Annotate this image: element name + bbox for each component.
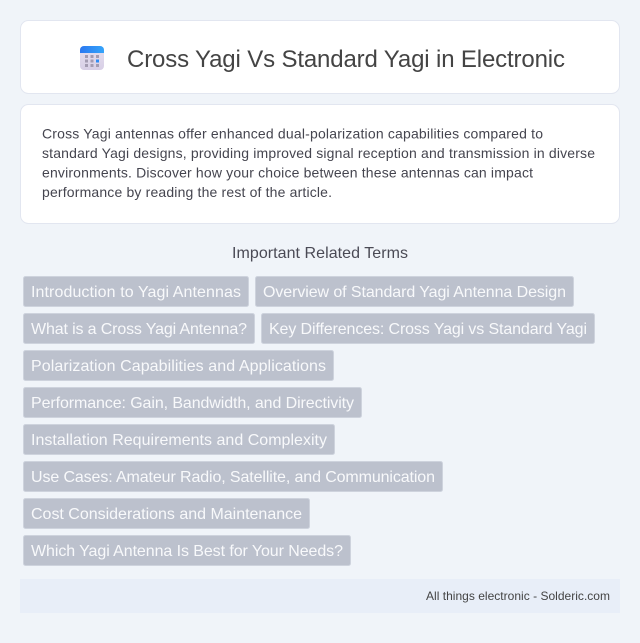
panel: intro paragraph — [20, 104, 620, 224]
title: Cross Yagi Vs Standard Yagi in Electronic — [127, 46, 565, 73]
tag: which — [24, 536, 350, 566]
panel: intro paragraph: standard Yagi designs, providing improved signal reception and transmission in diverse — [42, 145, 595, 161]
icon: calendar — [80, 46, 104, 70]
tag: cost — [24, 498, 310, 528]
tag: overview — [256, 276, 574, 306]
tag: overview: Overview of Standard Yagi Antenna Design — [263, 284, 566, 301]
tag: what is — [24, 314, 254, 344]
tag: use cases — [24, 462, 442, 492]
tag: polarization: Polarization Capabilities and Applications — [31, 358, 326, 375]
tag: introduction: Introduction to Yagi Antennas — [31, 284, 241, 301]
panel: intro paragraph: environments. Discover how your choice between these antennas can impact — [42, 164, 533, 180]
panel: intro paragraph: performance by reading the rest of the article. — [42, 184, 332, 200]
panel: intro paragraph: Cross Yagi antennas offer enhanced dual-polarization capabilities compared to — [42, 126, 543, 142]
tag: polarization — [24, 350, 334, 380]
tag: performance — [24, 388, 362, 418]
tag: performance: Performance: Gain, Bandwidth, and Directivity — [31, 395, 354, 412]
tag: introduction — [24, 276, 248, 306]
tag: cost: Cost Considerations and Maintenance — [31, 506, 302, 523]
tag: use cases: Use Cases: Amateur Radio, Satellite, and Communication — [31, 469, 435, 486]
tag: which: Which Yagi Antenna Is Best for Your Needs? — [31, 543, 343, 560]
heading: related terms: Important Related Terms — [232, 245, 408, 262]
tag: key differences — [262, 314, 594, 344]
tag: what is: What is a Cross Yagi Antenna? — [31, 321, 247, 338]
title panel — [20, 20, 620, 94]
tag: installation: Installation Requirements and Complexity — [31, 432, 327, 449]
footer: All things electronic - Solderic.com — [426, 589, 610, 603]
tag: installation — [24, 424, 334, 454]
footer — [20, 579, 620, 613]
tag: key differences: Key Differences: Cross Yagi vs Standard Yagi — [269, 321, 587, 338]
